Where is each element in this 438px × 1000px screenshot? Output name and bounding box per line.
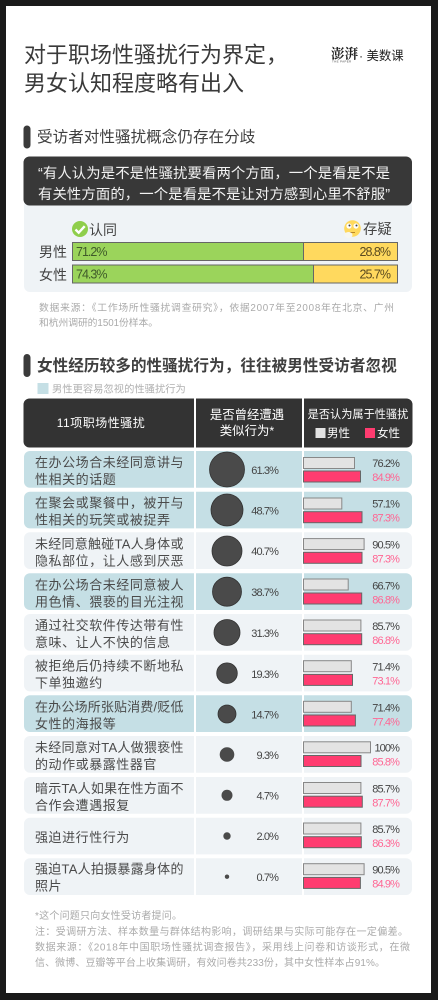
row 9: 暗示TA人如果在性方面不 xyxy=(35,781,184,796)
logo: The Paper data course: 美数课 xyxy=(366,48,404,63)
row 6: 73.1% xyxy=(372,676,400,688)
row 1 xyxy=(24,451,412,488)
row 2 xyxy=(24,491,412,529)
row 7: 女性的海报等 xyxy=(35,716,116,731)
row 7 xyxy=(24,695,412,733)
row 2: 57.1% xyxy=(372,499,400,511)
row 6: 被拒绝后仍持续不断地私 xyxy=(35,659,184,674)
row 8: 9.3% xyxy=(257,750,279,762)
row 4: 在办公场合未经同意被人 xyxy=(35,577,184,592)
footnotes: *这个问题只向女性受访者提问。 xyxy=(35,909,182,922)
row 1: 84.9% xyxy=(372,472,400,484)
row 1: 61.3% xyxy=(251,465,279,477)
footnotes: 注：受调研方法、样本数量与群体结构影响，调研结果与实际可能存在一定偏差。 xyxy=(35,925,408,938)
row 11: 强迫TA人拍摄暴露身体的 xyxy=(35,862,184,876)
row 1: 在办公场合未经同意讲与 xyxy=(35,455,184,470)
row 3 xyxy=(24,532,412,570)
row 5: 85.7% xyxy=(372,621,400,633)
table header xyxy=(24,398,412,448)
bar: female agree vs doubt: 女性 xyxy=(39,267,67,283)
row 2: 48.7% xyxy=(251,506,279,518)
table header: 类似行为* xyxy=(220,424,274,438)
row 3: 90.5% xyxy=(372,539,400,551)
row 9: 合作会遭遇报复 xyxy=(35,798,130,813)
row 6: 71.4% xyxy=(372,662,400,674)
row 6 xyxy=(24,654,412,692)
footnotes: 信、微博、豆瓣等平台上收集调研，有效问卷共233份，其中女性样本占91%。 xyxy=(35,956,385,969)
row 6: 19.3% xyxy=(251,669,279,681)
row 2: 在聚会或聚餐中，被开与 xyxy=(35,496,184,511)
legend: overlooked by men: 男性更容易忽视的性骚扰行为 xyxy=(52,382,186,396)
row 5: 通过社交软件传达带有性 xyxy=(35,618,184,633)
panel: agreement chart background xyxy=(24,200,412,292)
row 8: 未经同意对TA人做猥亵性 xyxy=(35,740,184,755)
bar: male agree vs doubt: 71.2% xyxy=(76,245,107,259)
row 11: 90.5% xyxy=(372,865,400,877)
row 6: 下单独邀约 xyxy=(35,676,103,691)
row 3: 87.3% xyxy=(372,553,400,565)
row 5 xyxy=(24,614,412,651)
logo: The Paper data course: THE PAPER xyxy=(332,60,352,64)
table header: 女性 xyxy=(377,426,400,440)
row 7: 71.4% xyxy=(372,702,400,714)
row 9 xyxy=(24,777,412,814)
row 4: 38.7% xyxy=(251,587,279,599)
legend: agree: 认同 xyxy=(89,222,117,238)
row 9: 87.7% xyxy=(372,798,400,810)
bar: male agree vs doubt: 男性 xyxy=(39,244,67,260)
quote box xyxy=(24,156,412,206)
table header: 11项职场性骚扰 xyxy=(57,416,145,430)
footnotes: 数据来源：《2018年中国职场性骚扰调查报告》，采用线上问卷和访谈形式，在微 xyxy=(35,940,410,954)
row 10 xyxy=(24,817,412,855)
section heading: concept disagreement xyxy=(24,126,256,148)
section heading: overlooked behaviours: 女性经历较多的性骚扰行为，往往被男性受访者忽视 xyxy=(37,356,397,375)
row 4: 用色情、猥亵的目光注视 xyxy=(35,594,184,609)
row 7: 在办公场所张贴消费/贬低 xyxy=(35,699,184,714)
row 10: 86.3% xyxy=(372,838,400,850)
row 8: 的动作或暴露性器官 xyxy=(35,757,157,772)
legend: agree xyxy=(72,221,117,238)
section heading: concept disagreement: 受访者对性骚扰概念仍存在分歧 xyxy=(37,127,256,146)
row 3: 隐私部位，让人感到厌恶 xyxy=(35,553,184,568)
row 11 xyxy=(24,858,412,896)
logo: The Paper data course: 澎湃 xyxy=(331,42,359,62)
row 8: 85.8% xyxy=(372,757,400,769)
row 7: 77.4% xyxy=(372,716,400,728)
logo: The Paper data course xyxy=(331,42,404,64)
row 5: 31.3% xyxy=(251,628,279,640)
row 11: 照片 xyxy=(35,878,62,894)
row 4: 86.8% xyxy=(372,594,400,606)
row 9: 85.7% xyxy=(372,784,400,796)
footnotes xyxy=(35,909,410,969)
row 9: 4.7% xyxy=(257,790,279,802)
legend: doubt xyxy=(344,220,392,238)
bar: female agree vs doubt: 25.7% xyxy=(360,268,391,282)
quote box: “有人认为是不是性骚扰要看两个方面，一个是看是不是 xyxy=(38,165,390,182)
row 7: 14.7% xyxy=(251,710,279,722)
quote box: 有关性方面的，一个是看是不是让对方感到心里不舒服” xyxy=(38,186,390,203)
row 8: 100% xyxy=(374,743,400,755)
source note: first study: 数据来源：《工作场所性骚扰调查研究》，依据2007年至2008年在北京、广州 xyxy=(39,301,394,314)
row 11: 0.7% xyxy=(257,872,279,884)
source note: first study xyxy=(39,301,394,329)
bar: male agree vs doubt xyxy=(39,242,398,260)
row 10: 强迫进行性行为 xyxy=(35,830,130,845)
row 5: 86.8% xyxy=(372,635,400,647)
bar: female agree vs doubt: 74.3% xyxy=(76,268,107,282)
table header: 男性 xyxy=(327,426,350,440)
title: 男女认知程度略有出入 xyxy=(24,71,244,96)
row 10: 2.0% xyxy=(257,831,279,843)
row 3: 40.7% xyxy=(251,546,279,558)
table header: 是否认为属于性骚扰 xyxy=(308,407,408,421)
row 2: 性相关的玩笑或被捉弄 xyxy=(35,513,171,528)
row 3: 未经同意触碰TA人身体或 xyxy=(35,536,184,551)
row 4 xyxy=(24,573,412,611)
row 2: 87.3% xyxy=(372,513,400,525)
row 10: 85.7% xyxy=(372,824,400,836)
bar: female agree vs doubt xyxy=(39,265,398,283)
row 8 xyxy=(24,736,412,773)
row 11: 84.9% xyxy=(372,879,400,891)
row 5: 意味、让人不快的信息 xyxy=(35,635,171,650)
legend: doubt: 存疑 xyxy=(363,221,392,238)
row 4: 66.7% xyxy=(372,580,400,592)
logo: The Paper data course: · xyxy=(359,49,363,63)
row 1: 76.2% xyxy=(372,458,400,470)
table header: 是否曾经遭遇 xyxy=(210,408,284,422)
source note: first study: 和杭州调研的1501份样本。 xyxy=(39,316,158,329)
title: 对于职场性骚扰行为界定， xyxy=(24,42,288,68)
title xyxy=(24,42,288,96)
row 1: 性相关的话题 xyxy=(35,472,116,487)
bar: male agree vs doubt: 28.8% xyxy=(360,245,391,259)
